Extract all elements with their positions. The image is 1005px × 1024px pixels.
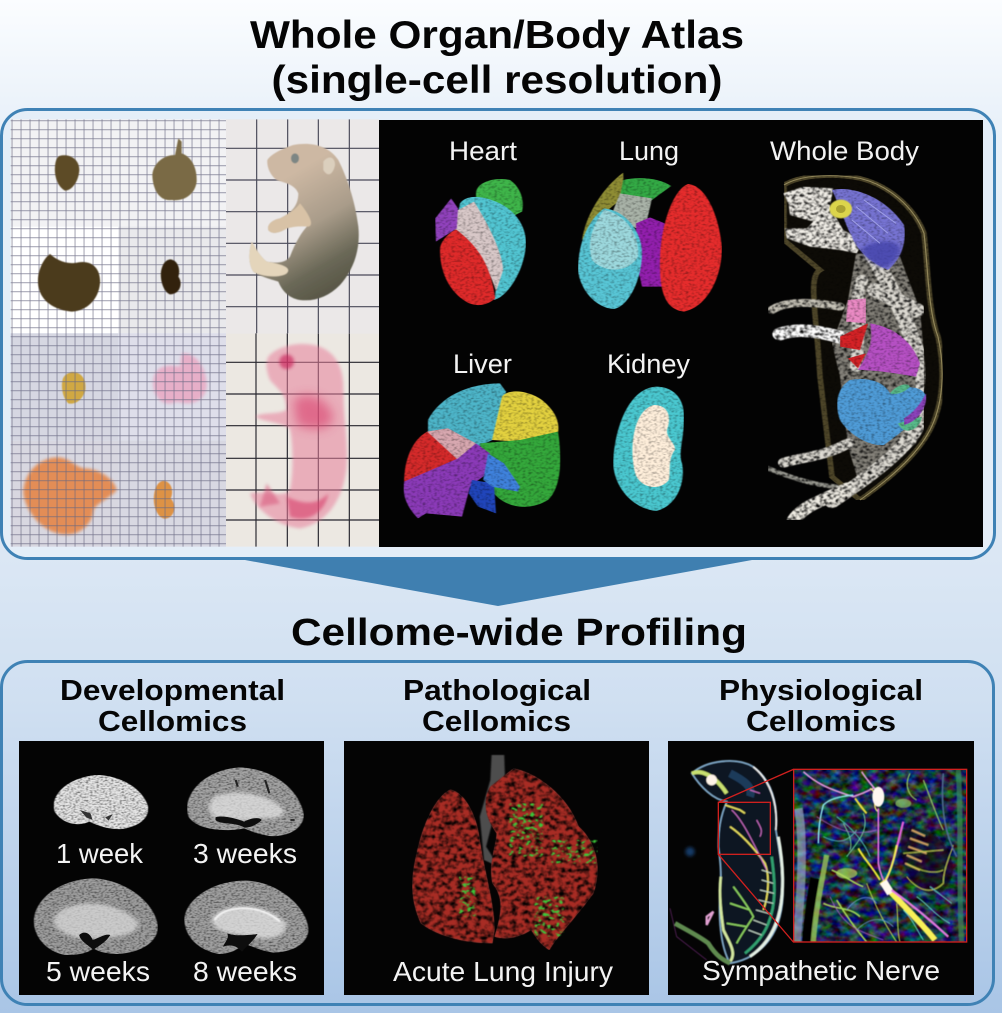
organ: lung [578,173,722,312]
panel: sympathetic nerve [668,741,974,995]
arrow: funnel from atlas to profiling [245,560,752,606]
photo: fixed mouse pup [249,144,359,300]
label: whole body: Whole Body [770,136,920,166]
label: acute lung injury: Acute Lung Injury [393,956,613,987]
organ: whole body skeleton [768,176,942,520]
callout: red zoom box and lines [718,769,967,942]
kidney: 5 weeks [34,878,158,955]
heading: cellome-wide profiling: Cellome-wide Profiling [291,612,747,654]
label: 5 weeks: 5 weeks [46,956,150,987]
label: 8 weeks: 8 weeks [193,956,297,987]
heading: pathological cellomics [403,675,591,738]
heading: physiological cellomics: Physiological [719,675,923,707]
organ photo: cleared heart [62,372,86,404]
organ photo: fixed kidney [161,259,181,294]
organ photo: cleared kidney [154,481,174,519]
3D organs [404,173,942,520]
heading: developmental cellomics [60,675,285,738]
organ photo: fixed heart [55,155,79,191]
label: liver: Liver [453,349,512,379]
label: 3 weeks: 3 weeks [193,838,297,869]
organ photo: cleared lung [153,353,207,404]
big grid upper [226,119,379,333]
panel: acute lung injury [344,741,649,995]
kidney: 3 weeks [187,767,304,836]
panel frame: atlas [2,110,994,558]
photo: cleared mouse pup [250,344,347,528]
kidney: 1 week [54,775,148,829]
image: magnified nerve inset [794,769,967,942]
title: (single-cell resolution) [272,59,722,102]
label: kidney: Kidney [607,349,690,379]
heading: physiological cellomics [719,675,923,738]
organ photo: fixed liver [38,254,100,312]
heading: physiological cellomics: Cellomics [746,706,896,738]
heading: pathological cellomics: Cellomics [422,706,571,738]
organ photo: fixed lung [152,138,197,200]
label: heart: Heart [449,136,518,166]
image: injured lung [412,755,598,950]
photo: organ tiles on grid paper [11,119,379,547]
organ: liver [404,383,560,518]
label: lung: Lung [619,136,679,166]
panel: whole organ and body atlas [2,110,994,558]
panel: developmental kidneys [19,741,324,995]
organ photo: cleared liver [23,457,117,534]
heading: developmental cellomics: Cellomics [98,706,247,738]
heading: pathological cellomics: Pathological [403,675,591,707]
title [250,14,744,102]
panel: black 3D organ panel [379,120,983,547]
kidney: 8 weeks [184,881,309,954]
panel frame: profiling [2,662,994,1004]
heading: developmental cellomics: Developmental [60,675,285,707]
label: sympathetic nerve: Sympathetic Nerve [702,955,940,986]
image: whole-body nerve map [670,761,783,963]
title: Whole Organ/Body Atlas [250,14,744,57]
big grid lower [226,333,379,547]
organ: kidney [613,387,684,511]
heading labels on atlas panel [449,136,920,379]
organ: heart [435,179,526,305]
panel: cellome-wide profiling [2,662,994,1004]
label: 1 week: 1 week [56,838,144,869]
